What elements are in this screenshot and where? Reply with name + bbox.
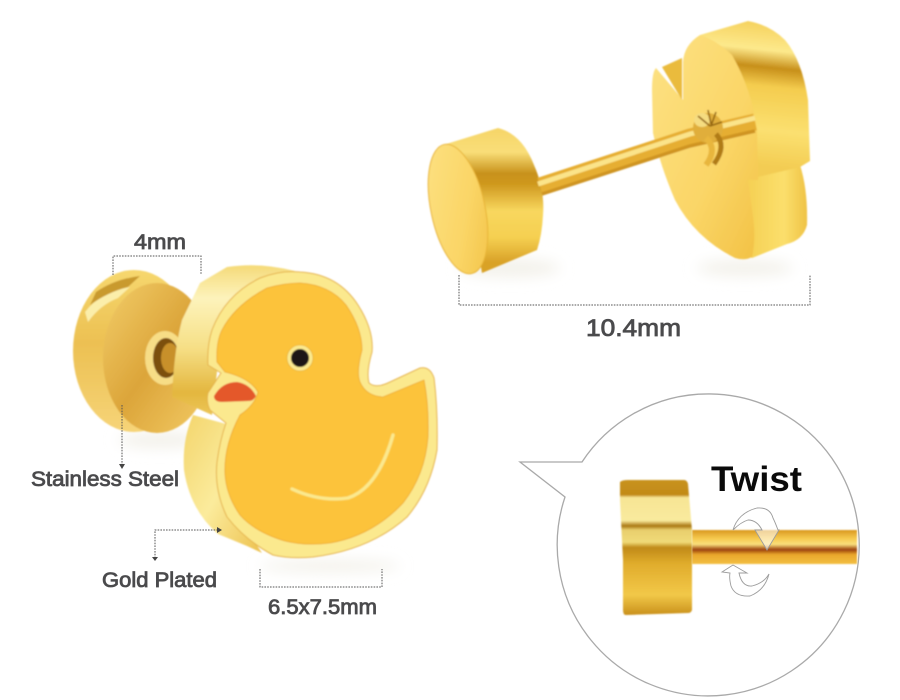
back disc xyxy=(73,270,195,432)
label: 4mm: 4mm xyxy=(134,231,186,254)
duck back plate face xyxy=(652,35,758,259)
rotation arrow lower xyxy=(722,565,769,596)
duck back plate upper side wall xyxy=(700,21,810,180)
duck eye xyxy=(287,345,313,371)
duck notch inner wall xyxy=(662,58,682,100)
arrowhead xyxy=(119,464,125,469)
dimension: 10.4mm xyxy=(459,275,810,342)
earring: front view with yellow duck xyxy=(73,265,437,558)
duck enamel xyxy=(217,283,428,544)
post collar xyxy=(693,110,723,165)
soft product shadows xyxy=(118,259,793,572)
callout: Stainless Steel xyxy=(31,405,179,491)
dimension: 6.5x7.5mm xyxy=(260,569,382,619)
duck wing line xyxy=(292,435,393,499)
duck head side wall xyxy=(172,265,295,415)
arrowhead right xyxy=(217,527,222,533)
back disc dark stripe xyxy=(90,276,140,305)
duck back plate lower side wall xyxy=(740,165,807,258)
post xyxy=(538,118,755,194)
small disc side wall xyxy=(443,128,543,273)
back disc highlight xyxy=(85,287,130,322)
dimension: 4mm xyxy=(113,231,201,275)
inner face xyxy=(103,283,211,433)
post and collar xyxy=(145,331,185,385)
callout: Gold Plated xyxy=(102,527,222,592)
rotation arrow upper xyxy=(733,508,779,550)
duck eye pupil xyxy=(291,349,309,367)
label: Gold Plated: Gold Plated xyxy=(102,569,217,592)
bubble outline xyxy=(520,394,859,696)
small disc face xyxy=(418,139,498,279)
pin xyxy=(692,530,857,564)
label: 10.4mm: 10.4mm xyxy=(586,315,681,342)
label: Twist: Twist xyxy=(711,460,802,499)
disc xyxy=(620,480,692,615)
panel: twist detail speech bubble xyxy=(520,394,859,696)
duck body side wall xyxy=(184,415,262,553)
label: 6.5x7.5mm: 6.5x7.5mm xyxy=(268,596,377,619)
duck rim xyxy=(207,272,437,558)
label: Stainless Steel: Stainless Steel xyxy=(31,468,179,491)
duck beak xyxy=(214,382,256,402)
earring: top view, back side xyxy=(418,21,810,279)
arrowhead down xyxy=(152,557,158,561)
